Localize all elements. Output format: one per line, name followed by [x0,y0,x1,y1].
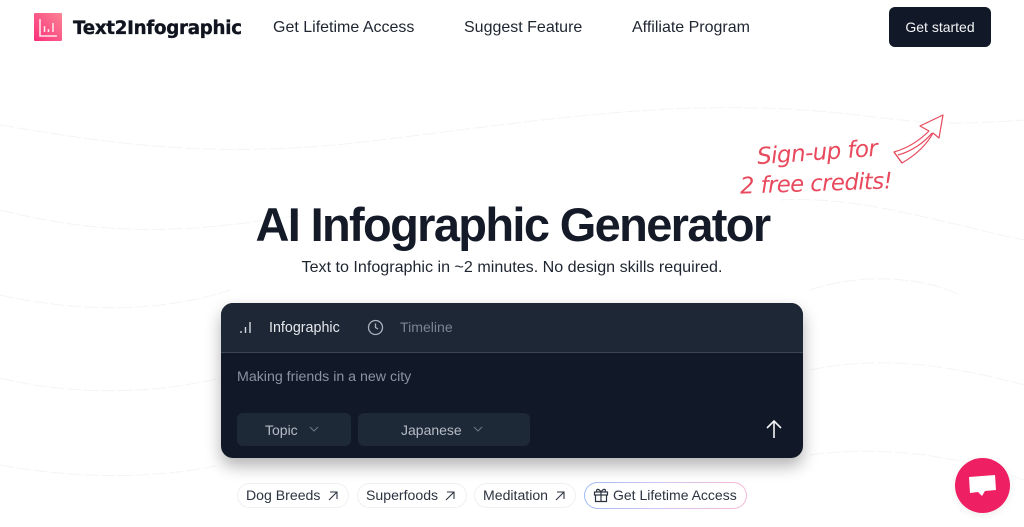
tab: Infographic: Infographic [269,320,340,336]
button: Get started: Get started [905,19,975,35]
pill: Get Lifetime Access: Get Lifetime Access [613,487,737,503]
icon: bars [240,322,251,333]
handwritten callout: Sign-up for [756,136,878,170]
logo [34,13,242,41]
logo text: Text2Infographic [73,18,242,39]
arrow: hand-drawn [893,114,944,164]
title: AI Infographic Generator [255,198,770,251]
chat button [955,458,1010,513]
dropdown: Topic: Topic [265,422,298,438]
pill: Get Lifetime Access [584,482,747,509]
tab: Timeline: Timeline [400,319,453,335]
subtitle: Text to Infographic in ~2 minutes. No design skills required. [302,258,722,276]
handwritten callout [740,136,893,200]
dropdown: Japanese: Japanese [401,422,462,438]
tab bar [221,303,803,353]
pill: Meditation [474,483,576,508]
placeholder text: Making friends in a new city [237,369,411,385]
nav link: Get Lifetime Access: Get Lifetime Access [273,19,414,36]
pill: Meditation: Meditation [483,487,548,503]
icon: send arrow [766,420,782,438]
icon: clock [368,320,384,336]
pill: Dog Breeds: Dog Breeds [246,487,320,503]
pill: Superfoods: Superfoods [366,487,438,503]
nav link: Suggest Feature: Suggest Feature [464,19,582,36]
panel: generator input [221,303,803,458]
dropdown: Topic [237,413,351,446]
icon: logo bars [34,13,62,41]
handwritten callout: 2 free credits! [740,168,893,200]
button: Get started [889,7,991,47]
pill: Superfoods [357,483,467,508]
nav link: Affiliate Program: Affiliate Program [632,19,750,36]
icon: chat bubble [969,475,996,496]
dropdown: Japanese [358,413,530,446]
icon: gift [594,488,608,502]
pill: Dog Breeds [237,483,349,508]
